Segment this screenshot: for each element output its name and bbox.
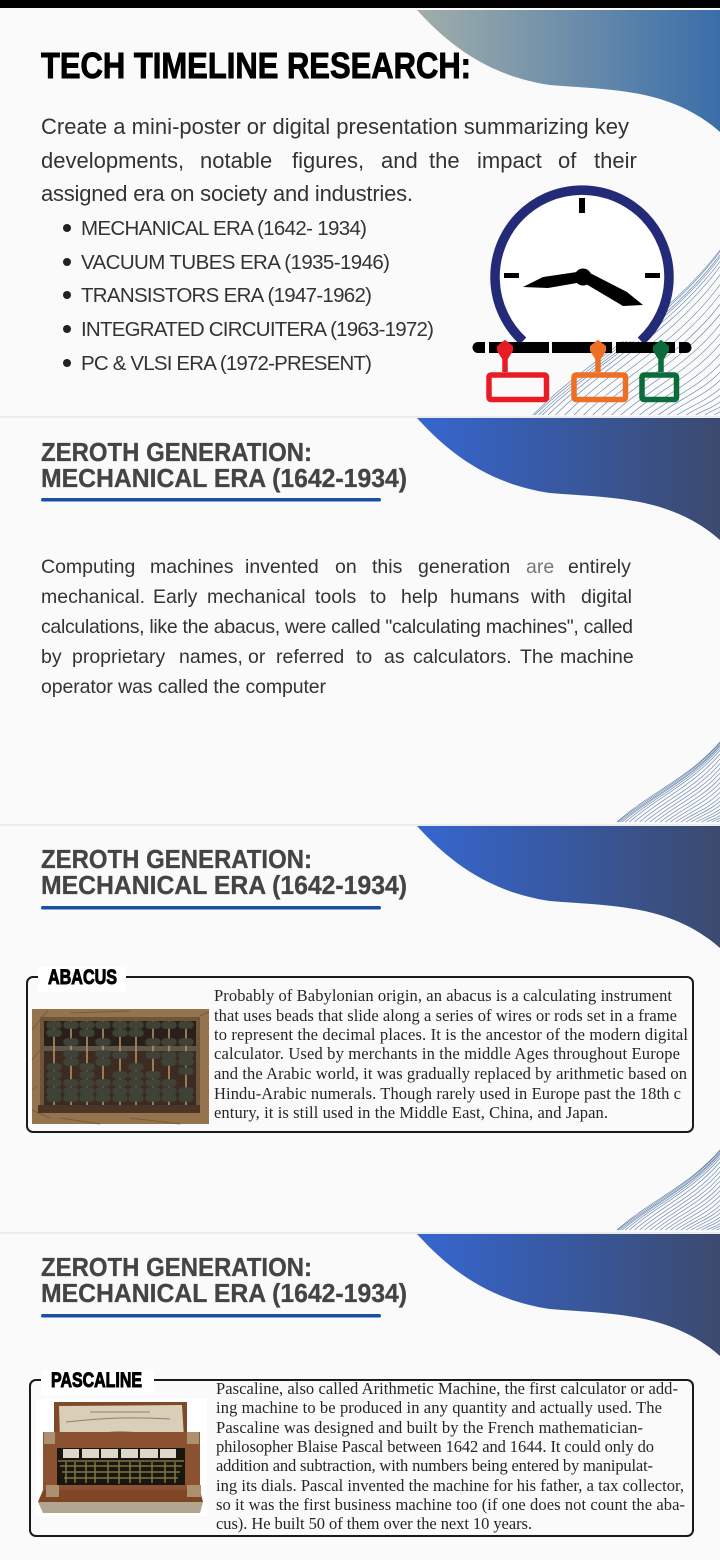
- heading: ZEROTH GENERATION:: [41, 1254, 312, 1282]
- intro paragraph: developments,: [41, 148, 184, 173]
- era list: VACUUM TUBES ERA (1935-1946): [81, 251, 390, 274]
- pascaline description: [216, 1379, 685, 1533]
- body text: mechanical.: [41, 586, 145, 608]
- heading: MECHANICAL ERA (1642-1934): [41, 872, 407, 900]
- abacus description: calculator. Used by merchants in the middle Ages throughout Europe: [214, 1044, 680, 1063]
- header wave: [417, 10, 720, 132]
- era list: TRANSISTORS ERA (1947-1962): [81, 284, 372, 307]
- header wave: [417, 418, 720, 540]
- heading: ZEROTH GENERATION:: [41, 439, 312, 467]
- body text: to: [370, 586, 386, 608]
- body text: invented: [245, 556, 319, 578]
- heading: ZEROTH GENERATION:: [41, 846, 312, 874]
- header wave: [417, 826, 720, 948]
- era list: MECHANICAL ERA (1642- 1934): [81, 217, 367, 240]
- panel: introduction: [41, 10, 720, 415]
- body text: names,: [179, 646, 243, 668]
- abacus card: [27, 966, 693, 1132]
- hatched corner decoration: [617, 1150, 720, 1230]
- intro paragraph: the: [429, 148, 460, 173]
- pascaline description: cus). He built 50 of them over the next 10 years.: [216, 1514, 532, 1533]
- pascaline description: philosopher Blaise Pascal between 1642 and 1644. It could only do: [216, 1437, 654, 1456]
- body text: operator was called the computer: [41, 676, 326, 698]
- body text: [41, 556, 634, 698]
- pascaline description: Pascaline was designed and built by the French mathematician-: [216, 1418, 643, 1437]
- era list: INTEGRATED CIRCUITERA (1963-1972): [81, 318, 434, 341]
- body text: machines: [150, 556, 234, 578]
- heading: MECHANICAL ERA (1642-1934): [41, 1280, 407, 1308]
- pascaline description: Pascaline, also called Arithmetic Machine, the first calculator or add-: [216, 1379, 678, 1398]
- abacus description: entury, it is still used in the Middle East, China, and Japan.: [214, 1103, 608, 1122]
- body text: humans: [450, 586, 520, 608]
- intro paragraph: figures,: [292, 148, 364, 173]
- abacus description: that uses beads that slide along a series of wires or rods set in a frame: [214, 1006, 677, 1025]
- body text: The: [520, 646, 554, 668]
- intro paragraph: notable: [200, 148, 272, 173]
- heading: MECHANICAL ERA (1642-1934): [41, 465, 407, 493]
- body text: digital: [581, 586, 632, 608]
- body text: by: [41, 646, 62, 668]
- card label: PASCALINE: [51, 1369, 142, 1392]
- pascaline description: so it was the first business machine too (if one does not count the aba-: [216, 1495, 685, 1514]
- body text: proprietary: [72, 646, 165, 668]
- icon: clock on timeline: [473, 190, 692, 400]
- abacus description: and the Arabic world, it was gradually replaced by arithmetic based on: [214, 1064, 687, 1083]
- body text: are: [526, 556, 554, 578]
- pascaline description: addition and subtraction, with numbers being entered by manipulat-: [216, 1456, 653, 1475]
- icon: pascaline photo: [36, 1399, 207, 1516]
- hatched corner decoration: [617, 742, 720, 822]
- heading: [41, 1254, 407, 1318]
- panel: pascaline: [0, 1232, 720, 1536]
- body text: referred: [276, 646, 344, 668]
- body text: on: [335, 556, 357, 578]
- body text: tools: [315, 586, 356, 608]
- pascaline description: ing machine to be produced in any quantity and actually used. The: [216, 1398, 662, 1417]
- top black bar: [0, 0, 720, 8]
- pascaline description: ing its dials. Pascal invented the machine for his father, a tax collector,: [216, 1476, 684, 1495]
- intro paragraph: assigned era on society and industries.: [41, 181, 413, 206]
- panel: abacus: [0, 824, 720, 1230]
- heading: [41, 439, 407, 502]
- icon: abacus photo: [32, 1009, 209, 1124]
- card label: ABACUS: [48, 966, 117, 989]
- header wave: [417, 1234, 720, 1356]
- body text: calculators.: [413, 646, 512, 668]
- era list: [63, 217, 434, 375]
- heading: [41, 846, 407, 910]
- panel: zeroth generation overview: [0, 416, 720, 822]
- body text: to: [356, 646, 372, 668]
- abacus description: [214, 986, 688, 1122]
- body text: entirely: [568, 556, 631, 578]
- body text: machine: [560, 646, 634, 668]
- body text: as: [384, 646, 405, 668]
- intro paragraph: and: [381, 148, 418, 173]
- abacus description: to represent the decimal places. It is the ancestor of the modern digital: [214, 1025, 688, 1044]
- pascaline card: [30, 1369, 693, 1536]
- intro paragraph: of: [558, 148, 577, 173]
- body text: generation: [418, 556, 510, 578]
- title: TECH TIMELINE RESEARCH:: [41, 45, 471, 86]
- intro paragraph: [41, 114, 637, 206]
- body text: Computing: [41, 556, 135, 578]
- abacus description: Hindu-Arabic numerals. Though rarely used in Europe past the 18th c: [214, 1084, 681, 1103]
- abacus description: Probably of Babylonian origin, an abacus is a calculating instrument: [214, 986, 672, 1005]
- era list: PC & VLSI ERA (1972-PRESENT): [81, 352, 372, 375]
- body text: or: [248, 646, 266, 668]
- intro paragraph: Create a mini-poster or digital presentation summarizing key: [41, 114, 629, 139]
- body text: help: [401, 586, 438, 608]
- body text: this: [372, 556, 403, 578]
- body text: calculations, like the abacus, were called "calculating machines", called: [41, 616, 633, 638]
- body text: Early: [153, 586, 198, 608]
- intro paragraph: impact: [477, 148, 542, 173]
- body text: with: [530, 586, 566, 608]
- body text: mechanical: [207, 586, 306, 608]
- intro paragraph: their: [594, 148, 637, 173]
- hatched corner decoration: [533, 250, 720, 415]
